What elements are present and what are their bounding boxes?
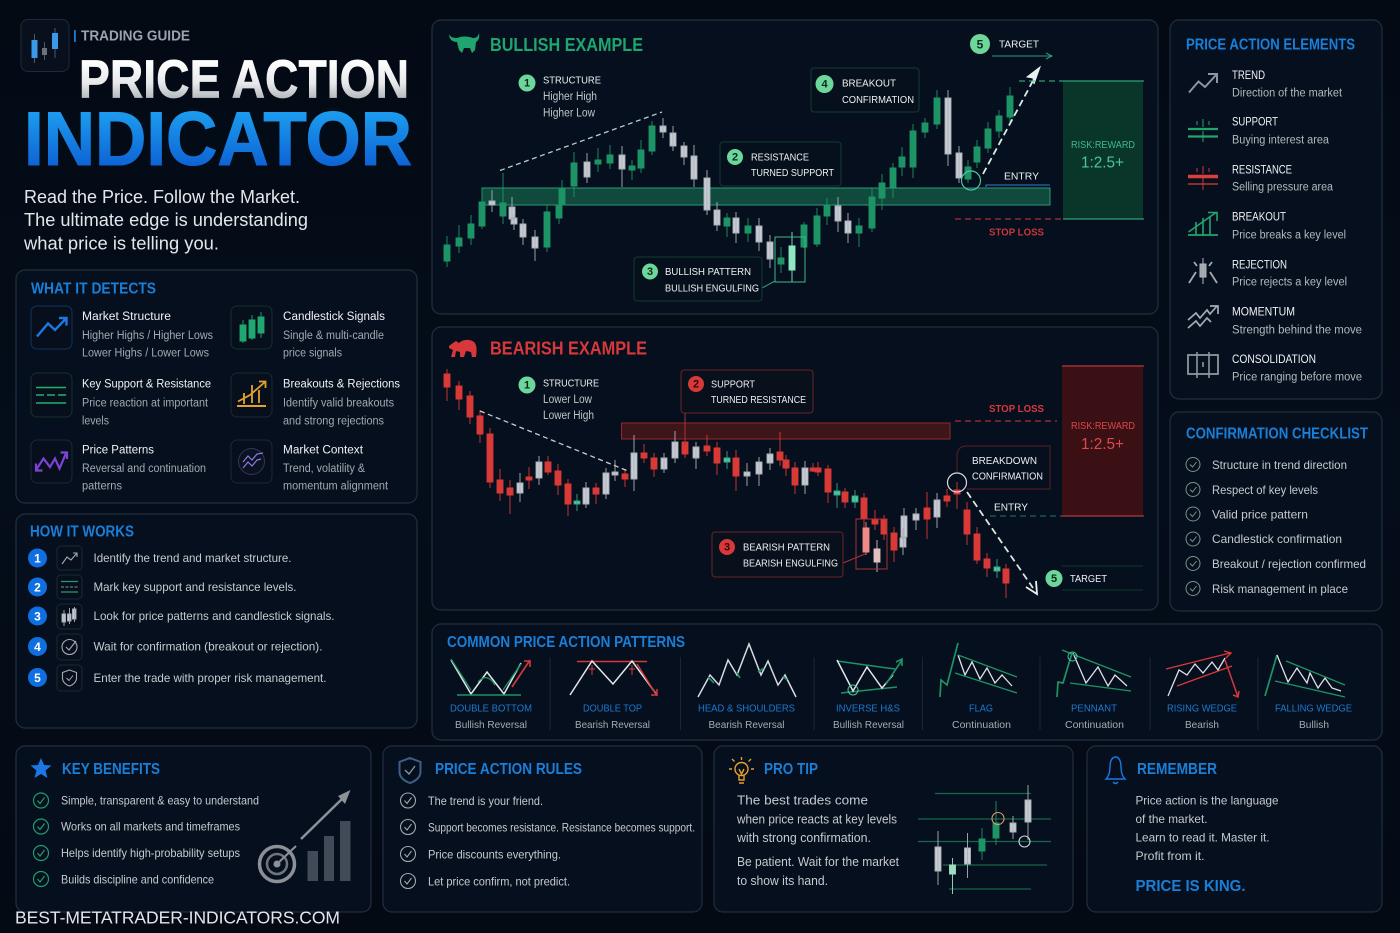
pattern: pennant: Continuation [1065,719,1124,731]
callout: price is king: PRICE IS KING. [1136,878,1246,895]
item: candlestick signals: Candlestick Signals [283,311,385,323]
subtitle: The ultimate edge is understanding [24,209,308,230]
item: market structure: Higher Highs / Higher Lows [82,330,213,342]
element: rejection: Price rejects a key level [1232,277,1347,289]
item: market structure: Market Structure [82,311,171,323]
step 2: 2 [34,581,41,595]
risk reward box: RISK:REWARD [1071,139,1135,151]
pattern: double bottom: DOUBLE BOTTOM [450,703,532,715]
item: price patterns: Price Patterns [82,445,154,457]
callout 3: bullish pattern: BULLISH ENGULFING [665,283,759,295]
callout 2: support turned resistance: 2 [693,379,699,391]
item: breakouts and rejections: and strong rejections [283,416,384,428]
pattern: double top: DOUBLE TOP [583,703,642,715]
callout 1: structure: STRUCTURE [543,378,599,390]
checklist text [1212,458,1366,596]
rules list: Support becomes resistance. Resistance becomes support. [428,821,695,835]
pattern: inverse head and shoulders: Bullish Reversal [833,719,904,731]
item: market context [231,440,389,493]
callout 2: resistance turned support: RESISTANCE [751,152,809,164]
callout 1: structure: 1 [524,380,530,392]
step 2: Mark key support and resistance levels. [94,580,296,594]
callout 2: support turned resistance [681,370,813,445]
title: PRICE ACTION [79,50,409,110]
risk reward box [1062,366,1144,516]
step 4: 4 [34,640,41,654]
item: candlestick signals: price signals [283,348,342,360]
header: logo icon [21,20,69,72]
item: breakouts and rejections [231,373,400,428]
callout 2: support turned resistance: TURNED RESISTANCE [711,394,806,406]
item: key support and resistance: Price reaction at important [82,398,209,410]
risk reward box [1019,81,1144,219]
callout 2: resistance turned support [720,142,841,186]
pattern: falling wedge [1265,655,1352,731]
item: candlestick signals: Single & multi-candle [283,330,384,342]
pro tip text: when price reacts at key levels [736,812,897,827]
checklist text: Candlestick confirmation [1212,532,1342,546]
element: momentum: MOMENTUM [1232,307,1295,319]
rules list: Let price confirm, not predict. [428,875,570,889]
element: resistance: RESISTANCE [1232,165,1292,177]
heading: remember: REMEMBER [1137,761,1217,778]
element: consolidation: Price ranging before move [1232,372,1362,384]
icon: bear [449,340,477,357]
rules list: Price discounts everything. [428,848,561,862]
element: consolidation [1188,352,1362,384]
panel: remember [1087,746,1382,912]
pattern: double top [570,661,657,731]
checklist text: Risk management in place [1212,582,1348,596]
benefits list: Builds discipline and confidence [61,873,214,887]
step 2 [28,575,296,599]
callout 1: structure: Higher Low [543,108,596,120]
title: INDICATOR [24,97,412,182]
pattern: double bottom [450,659,532,731]
heading: common patterns: COMMON PRICE ACTION PATTERNS [447,634,685,651]
heading: pro tip: PRO TIP [764,761,818,778]
heading: confirmation checklist: CONFIRMATION CHECKLIST [1186,426,1368,443]
pattern: flag: FLAG [969,703,993,715]
stop loss label [955,219,1063,239]
item: price patterns: patterns [82,481,122,493]
item: market context: Market Context [283,445,364,457]
item: price patterns: Reversal and continuation [82,463,206,475]
item: market structure [31,306,213,360]
pro tip text [736,793,899,888]
heading: bullish example: BULLISH EXAMPLE [490,35,643,55]
checklist items [1186,458,1200,596]
panel: how it works [16,514,417,728]
callout: breakdown confirmation: BREAKDOWN [972,455,1037,467]
callout 4: breakout confirmation: CONFIRMATION [842,94,914,106]
callout 3: bearish pattern: BEARISH ENGULFING [743,558,838,570]
checklist text: Respect of key levels [1212,483,1318,497]
subtitle: what price is telling you. [23,233,219,254]
benefits list: Works on all markets and timeframes [61,820,240,834]
element: rejection: REJECTION [1232,260,1287,272]
callout 5: target: 5 [977,38,984,52]
callout: breakdown confirmation [957,446,1050,489]
element: consolidation: CONSOLIDATION [1232,354,1316,366]
remember text [1136,794,1279,863]
pattern: rising wedge [1166,651,1239,731]
step 1 [28,546,292,570]
callout 1: structure: Higher High [543,91,597,103]
item: market context: Trend, volatility & [283,463,365,475]
entry label: ENTRY [994,502,1028,514]
pattern: pennant [1057,650,1131,731]
callout 1: structure: 1 [524,78,530,90]
element: breakout [1188,212,1346,242]
bullish candlestick chart [444,87,1050,282]
step 5: Enter the trade with proper risk management. [94,671,326,685]
pattern: rising wedge: RISING WEDGE [1167,703,1237,715]
step 1: Identify the trend and market structure. [94,551,292,565]
subtitle [23,186,308,254]
pattern: falling wedge: FALLING WEDGE [1275,703,1352,715]
callout 3: bearish pattern [712,532,865,577]
element: breakout: BREAKOUT [1232,212,1286,224]
subtitle: Read the Price. Follow the Market. [24,186,300,207]
footer: website: BEST-METATRADER-INDICATORS.COM [15,908,340,928]
remember text: of the market. [1136,812,1208,826]
pro tip text: to show its hand. [737,873,828,888]
callout 1: structure: STRUCTURE [543,75,601,87]
risk reward box: RISK:REWARD [1071,420,1135,432]
entry label [990,502,1062,516]
element: trend [1189,70,1343,100]
callout 3: bullish pattern [634,257,775,301]
pro tip text: The best trades come [737,793,868,808]
entry label [986,171,1050,187]
entry label: ENTRY [1004,171,1039,183]
pattern: double bottom: Bullish Reversal [455,719,527,731]
panel: price action elements [1170,20,1382,399]
callout 2: resistance turned support: TURNED SUPPORT [751,167,834,179]
callout 5: target [1046,566,1143,590]
pattern: head and shoulders: HEAD & SHOULDERS [698,703,795,715]
arrow: bullish move [983,67,1040,174]
stop loss label: STOP LOSS [989,403,1044,415]
callout 1: structure: Lower High [543,410,594,422]
panel: price action rules [383,746,702,912]
element: trend: Direction of the market [1232,88,1343,100]
heading: bearish example: BEARISH EXAMPLE [490,339,647,359]
benefits list: Simple, transparent & easy to understand [61,794,259,808]
callout 5: target: 5 [1051,573,1057,585]
step 1: 1 [34,552,41,566]
icon: light bulb [729,757,754,783]
bearish candlestick chart [444,369,1009,598]
rules list: The trend is your friend. [428,794,543,808]
step 5: 5 [34,671,41,685]
element: trend: TREND [1232,70,1265,82]
icon: star [30,758,52,778]
callout 4: breakout confirmation: BREAKOUT [842,78,897,90]
item: candlestick signals [231,306,385,360]
pro tip text: Be patient. Wait for the market [737,854,899,869]
mini candlestick chart [918,785,1051,894]
pattern: head and shoulders: Bearish Reversal [708,719,784,731]
icon: bell [1106,757,1125,784]
item: key support and resistance [31,373,211,428]
element: resistance [1188,165,1334,194]
arrow: bearish move [967,492,1037,594]
panel: common price action patterns [432,624,1382,740]
pattern: double top: Bearish Reversal [575,719,650,731]
element: support: SUPPORT [1232,117,1278,129]
heading: price action rules: PRICE ACTION RULES [435,761,582,778]
stop loss label [955,403,1057,421]
step 4 [28,634,322,660]
panel: confirmation checklist [1170,412,1382,611]
step 5 [28,665,326,691]
callout: breakdown confirmation: CONFIRMATION [972,471,1043,483]
header: eyebrow: TRADING GUIDE [81,29,190,45]
element: momentum: Strength behind the move [1232,325,1362,337]
icon: shield [400,758,420,783]
item: market structure: Lower Highs / Lower Lows [82,348,209,360]
pattern: flag: Continuation [952,719,1011,731]
remember text: Price action is the language [1136,794,1279,808]
title [24,50,412,182]
pattern: falling wedge: Bullish [1299,719,1329,731]
heading: key benefits: KEY BENEFITS [62,761,160,778]
benefits list [34,793,259,887]
callout 3: bearish pattern: BEARISH PATTERN [743,542,830,554]
item: price patterns [31,440,206,493]
rules list [400,793,695,889]
element: breakout: Price breaks a key level [1232,230,1346,242]
pattern: rising wedge: Bearish [1185,719,1219,731]
checklist text: Breakout / rejection confirmed [1212,557,1366,571]
pro tip text: with strong confirmation. [736,830,871,845]
heading: what it detects: WHAT IT DETECTS [31,281,156,298]
callout 4: breakout confirmation [811,68,919,112]
callout 1: structure [518,376,599,422]
checklist text: Structure in trend direction [1212,458,1347,472]
element: resistance: Selling pressure area [1232,182,1334,194]
item: market context: momentum alignment [283,481,389,493]
step 4: Wait for confirmation (breakout or rejection). [94,640,322,654]
callout 3: bullish pattern: BULLISH PATTERN [665,266,751,278]
illustration: target and growth bars [260,790,350,882]
callout 3: bearish pattern: 3 [724,542,730,554]
risk reward box: 1:2.5+ [1081,155,1124,172]
pattern: head and shoulders [698,644,796,731]
callout 5: target: TARGET [999,39,1040,51]
panel: pro tip [714,746,1073,912]
callout 5: target [970,34,1052,59]
panel: what it detects [16,270,417,503]
item: key support and resistance: levels [82,416,109,428]
pattern: inverse head and shoulders: INVERSE H&S [836,703,900,715]
panel: key benefits [16,746,371,912]
benefits list: Helps identify high-probability setups [61,846,240,860]
panel: bullish example [432,20,1158,314]
element: rejection [1189,258,1347,289]
callout 2: resistance turned support: 2 [732,152,738,164]
item: breakouts and rejections: Identify valid breakouts [283,398,394,410]
pattern: pennant: PENNANT [1071,703,1118,715]
heading: price action elements: PRICE ACTION ELEMENTS [1186,37,1355,54]
stop loss label: STOP LOSS [989,227,1044,239]
risk reward box: 1:2.5+ [1081,436,1124,453]
heading: how it works: HOW IT WORKS [30,524,134,541]
callout 1: structure: Lower Low [543,394,593,406]
step 3 [28,604,334,629]
step 3: 3 [34,610,41,624]
step 3: Look for price patterns and candlestick signals. [94,609,334,623]
panel: bearish example [432,327,1158,610]
callout 5: target: TARGET [1070,573,1108,585]
remember text: Profit from it. [1136,849,1204,863]
callout 1: structure [518,74,601,120]
pattern: flag [940,643,1017,731]
callout 4: breakout confirmation: 4 [821,79,828,91]
item: breakouts and rejections: Breakouts & Rejections [283,379,400,391]
callout 2: support turned resistance: SUPPORT [711,379,756,391]
element: support [1188,117,1330,147]
element: momentum [1188,306,1362,337]
element: support: Buying interest area [1232,135,1330,147]
pattern: inverse head and shoulders [833,659,904,731]
checklist text: Valid price pattern [1212,508,1308,522]
callout 3: bullish pattern: 3 [647,266,653,278]
remember text: Learn to read it. Master it. [1136,831,1270,845]
item: key support and resistance: Key Support & Resistance [82,379,211,391]
icon: bull [449,33,479,53]
